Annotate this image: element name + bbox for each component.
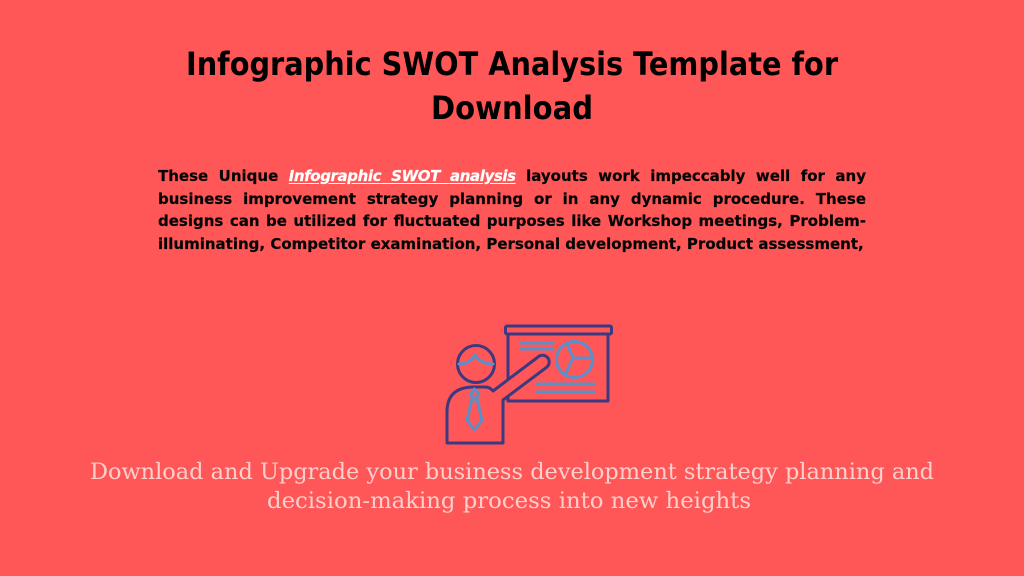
board lines and pie chart — [521, 342, 594, 392]
body paragraph: designs can be utilized for fluctuated purposes like Workshop meetings, Problem- — [158, 212, 866, 230]
body paragraph — [158, 167, 866, 253]
footer tagline: Download and Upgrade your business development strategy planning and — [90, 460, 934, 485]
title: Download — [431, 89, 593, 127]
footer tagline: decision-making process into new heights — [267, 489, 751, 514]
body paragraph: illuminating, Competitor examination, Personal development, Product assessment, — [158, 235, 864, 253]
board and figure outline — [447, 326, 612, 443]
title: Infographic SWOT Analysis Template for — [186, 45, 838, 83]
hair and tie — [459, 355, 493, 430]
title — [186, 45, 838, 127]
body paragraph: business improvement strategy planning or in any dynamic procedure. These — [158, 190, 866, 208]
body paragraph: These Unique Infographic SWOT analysis layouts work impeccably well for any — [158, 167, 866, 185]
